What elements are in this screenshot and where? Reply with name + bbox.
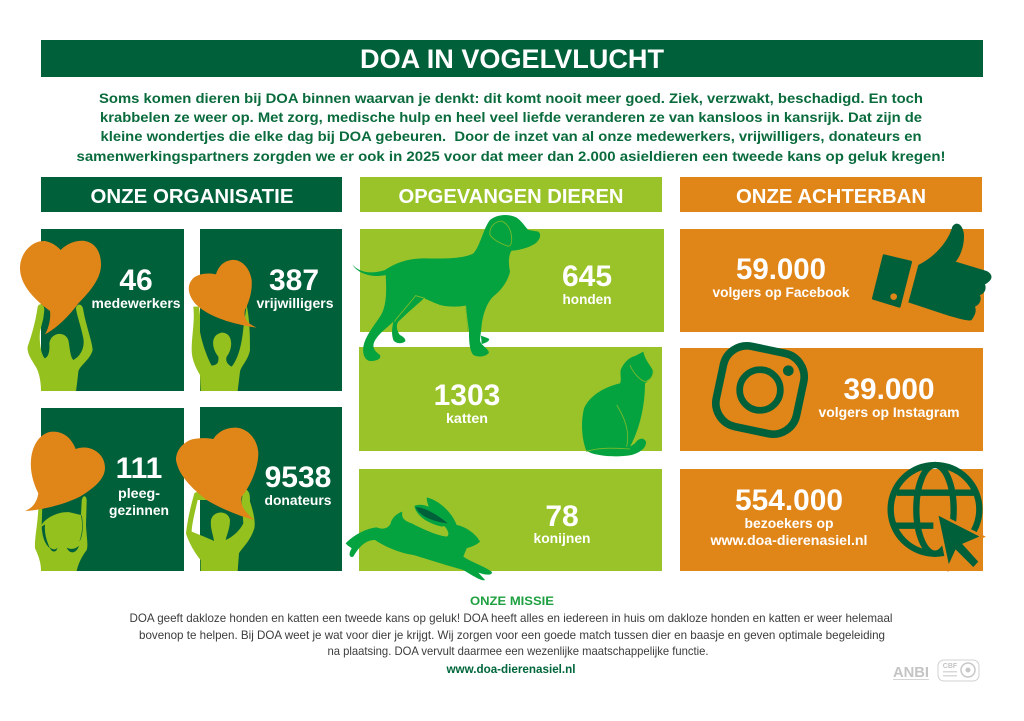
panel: onze achterban bbox=[680, 177, 991, 571]
tile: medewerkers bbox=[20, 229, 184, 391]
heading: onze achterban: ONZE ACHTERBAN bbox=[736, 186, 926, 208]
tile: website: 554.000 bbox=[735, 484, 843, 517]
title: DOA IN VOGELVLUCHT bbox=[360, 44, 665, 74]
logos: ANBI and CBF bbox=[893, 660, 979, 681]
panel: onze organisatie bbox=[20, 177, 342, 571]
website link: www.doa-dierenasiel.nl bbox=[446, 662, 576, 676]
mission text bbox=[130, 611, 892, 658]
logos: ANBI and CBF: CBF bbox=[943, 663, 958, 670]
tile: website: www.doa-dierenasiel.nl bbox=[709, 532, 868, 548]
heading: onze organisatie bbox=[41, 177, 342, 212]
tile: konijnen: 78 bbox=[545, 500, 579, 533]
tile: honden: honden bbox=[562, 291, 612, 307]
mission text: bovenop te helpen. Bij DOA weet je wat voor dier je krijgt. Wij zorgen voor een goede match tussen dier en baasje en geven optimale begeleiding bbox=[139, 628, 885, 642]
heading: opgevangen dieren bbox=[360, 177, 662, 212]
mission text: na plaatsing. DOA vervult daarmee een wezenlijke maatschappelijke functie. bbox=[328, 644, 708, 658]
tile: pleeggezinnen: gezinnen bbox=[109, 502, 169, 518]
tile: pleeggezinnen: 111 bbox=[116, 452, 162, 485]
intro text: Soms komen dieren bij DOA binnen waarvan je denkt: dit komt nooit meer goed. Ziek, verzwakt, beschadigd. En toch bbox=[99, 90, 923, 106]
tile: katten bbox=[359, 347, 662, 451]
tile: pleeggezinnen bbox=[25, 408, 184, 571]
tile: donateurs: donateurs bbox=[264, 492, 332, 508]
intro text: krabbelen ze weer op. Met zorg, medische hulp en heel veel liefde veranderen ze van kansloos in kansrijk. Dat zijn de bbox=[100, 109, 922, 125]
tile: vrijwilligers bbox=[189, 229, 342, 391]
tile: katten: katten bbox=[446, 410, 488, 426]
tile: instagram: 39.000 bbox=[844, 373, 934, 406]
onze missie heading: ONZE MISSIE bbox=[470, 594, 554, 608]
tile: website: bezoekers op bbox=[744, 515, 834, 531]
icon: instagram bbox=[711, 341, 809, 439]
tile: vrijwilligers: 387 bbox=[269, 264, 319, 297]
icon: thumbs up bbox=[873, 224, 991, 320]
tile: konijnen: konijnen bbox=[534, 530, 590, 546]
mission text: DOA geeft dakloze honden en katten een tweede kans op geluk! DOA heeft alles en iedereen in huis om dakloze honden en katten er weer helemaal bbox=[130, 611, 892, 625]
tile: donateurs bbox=[176, 407, 342, 571]
tile: katten: 1303 bbox=[434, 379, 500, 412]
heading: onze achterban bbox=[680, 177, 982, 212]
tile: honden bbox=[360, 229, 664, 332]
tile: instagram bbox=[680, 341, 983, 451]
intro text: kleine wondertjes die elke dag bij DOA gebeuren. Door de inzet van al onze medewerkers, vrijwilligers, donateurs en bbox=[100, 128, 922, 144]
tile: website bbox=[680, 465, 983, 571]
panel: opgevangen dieren bbox=[346, 177, 664, 580]
intro text bbox=[76, 90, 946, 164]
icon: rabbit bbox=[346, 497, 492, 580]
tile: medewerkers: medewerkers bbox=[92, 295, 181, 311]
icon: cat bbox=[582, 352, 653, 456]
tile: konijnen bbox=[359, 469, 662, 571]
tile: honden: 645 bbox=[562, 260, 612, 293]
tile: pleeggezinnen: pleeg- bbox=[118, 485, 160, 501]
tile: facebook bbox=[680, 224, 991, 332]
icon: dog bbox=[352, 215, 540, 361]
tile: instagram: volgers op Instagram bbox=[818, 404, 960, 420]
tile: facebook: 59.000 bbox=[736, 253, 826, 286]
heading: onze organisatie: ONZE ORGANISATIE bbox=[90, 186, 294, 208]
heading: opgevangen dieren: OPGEVANGEN DIEREN bbox=[398, 186, 624, 208]
tile: medewerkers: 46 bbox=[119, 264, 153, 297]
logos: ANBI and CBF: ANBI bbox=[893, 664, 929, 681]
tile: donateurs: 9538 bbox=[265, 461, 331, 494]
intro text: samenwerkingspartners zorgden we er ook in 2025 voor dat meer dan 2.000 asieldieren een tweede kans op geluk kregen! bbox=[76, 148, 946, 164]
icon: globe with cursor bbox=[891, 465, 983, 569]
tile: facebook: volgers op Facebook bbox=[712, 284, 850, 300]
title bbox=[41, 40, 983, 77]
tile: vrijwilligers: vrijwilligers bbox=[256, 295, 334, 311]
